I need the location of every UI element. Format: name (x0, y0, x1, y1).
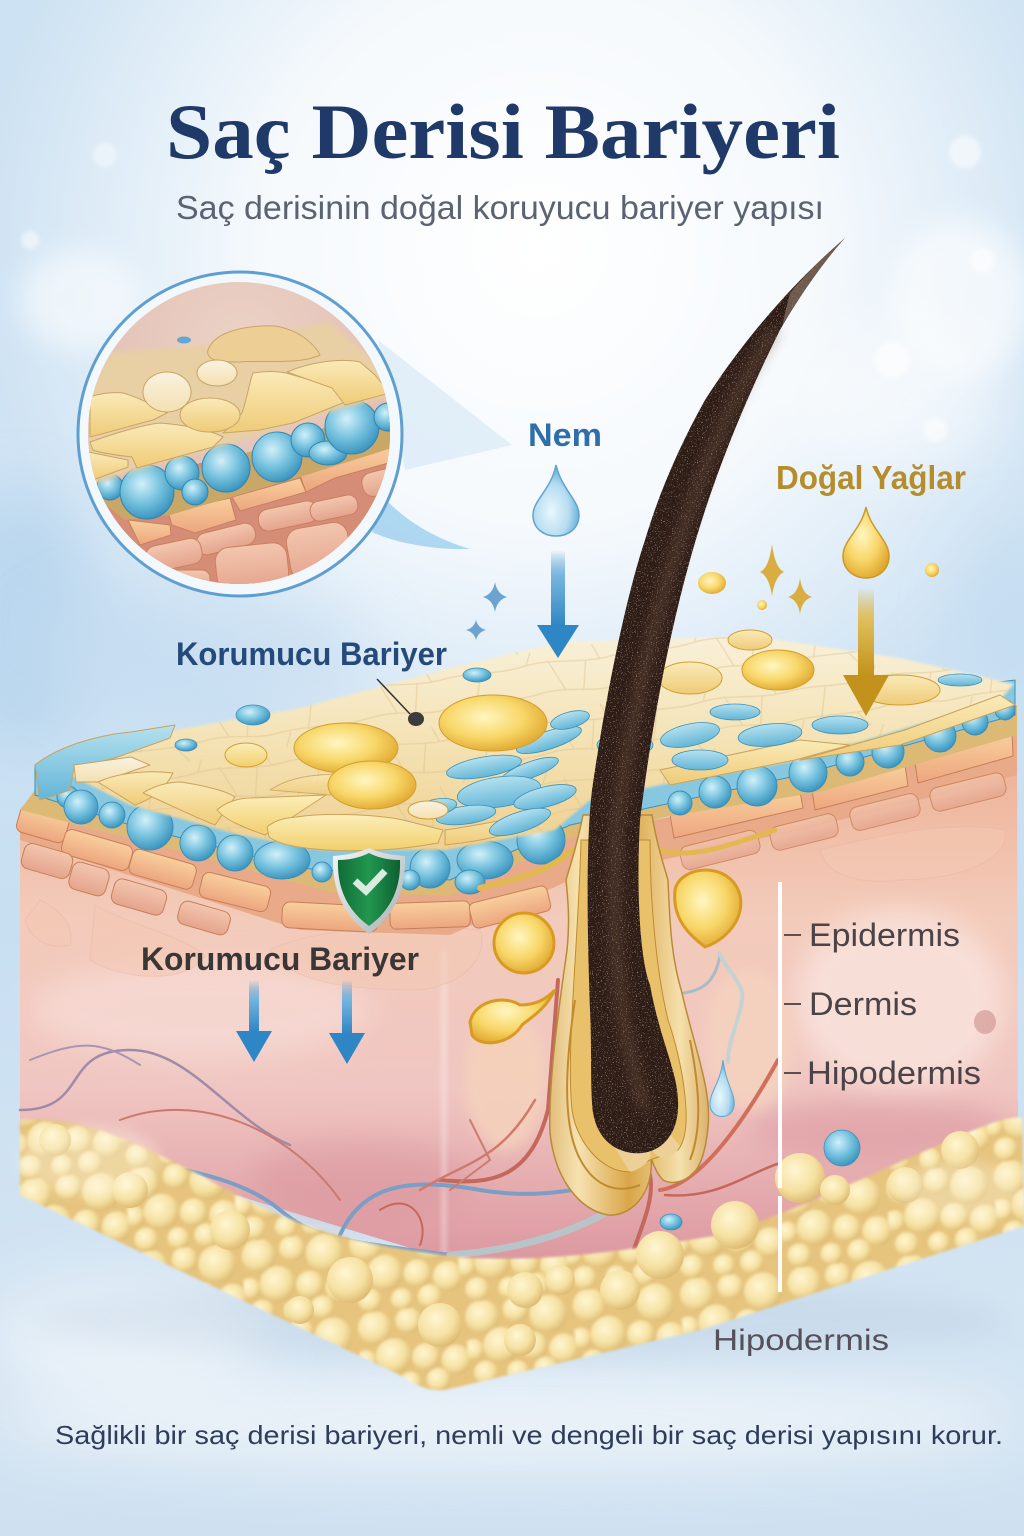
inset circle: magnified barrier (78, 272, 404, 600)
pointer line (377, 679, 424, 726)
oil glands (470, 870, 741, 1043)
inset: water bubbles (97, 400, 402, 519)
dermis lobes (25, 827, 1005, 990)
block shadow (30, 1280, 1010, 1360)
water bubble band (35, 680, 1015, 894)
footer caption: Sağlikli bir saç derisi bariyeri, nemli ve dengeli bir saç derisi yapısını korur. (55, 1420, 1003, 1450)
follicle sheath (550, 815, 709, 1215)
sweat gland droplet (710, 1060, 734, 1116)
label: Nem: Nem (528, 417, 602, 453)
dermis highlights (30, 910, 1010, 1290)
label: Dermis: Dermis (809, 986, 917, 1022)
sparkles and oil droplets (466, 544, 939, 640)
water droplets on surface (175, 668, 860, 1230)
tan underlayer (20, 705, 1017, 896)
protective barrier label: Korumucu Bariyer (176, 636, 447, 672)
oil droplets on surface (225, 630, 940, 819)
subtitle: Saç derisinin doğal koruyucu bariyer yapısı (176, 189, 824, 226)
icon: oil drop (843, 507, 889, 578)
blood vessels (20, 953, 790, 1255)
arrow: oils down (843, 588, 889, 716)
label: lower Hipodermis: Hipodermis (713, 1324, 889, 1357)
arrow: moisture down (537, 550, 579, 658)
fat layer (20, 1117, 1024, 1390)
inset: skin bricks (98, 422, 390, 584)
gold collar lines (480, 830, 775, 888)
hair shaft (588, 238, 845, 1153)
icon: shield (333, 848, 405, 934)
label: Epidermis: Epidermis (809, 917, 960, 953)
inset: oil cells (85, 322, 392, 484)
layer scale line (778, 882, 801, 1292)
label: Hipodermis: Hipodermis (807, 1055, 981, 1091)
magnifier pointer cone (372, 340, 512, 549)
blue cells on surface (416, 674, 982, 841)
brick layer (15, 730, 1017, 937)
fat highlights (20, 1124, 1020, 1356)
top oil surface (35, 636, 1015, 851)
inset: tan sublayer (100, 405, 395, 520)
label: natural oils: Doğal Yağlar (776, 459, 966, 496)
panel: skin block (15, 630, 1024, 1390)
arrows: barrier downward (236, 980, 365, 1064)
title: Saç Derisi Bariyeri (166, 88, 840, 175)
dermis layer (20, 770, 1018, 1260)
icon: water drop (533, 465, 579, 536)
barrier label: Korumucu Bariyer (141, 941, 419, 977)
layer labels (807, 917, 981, 1091)
